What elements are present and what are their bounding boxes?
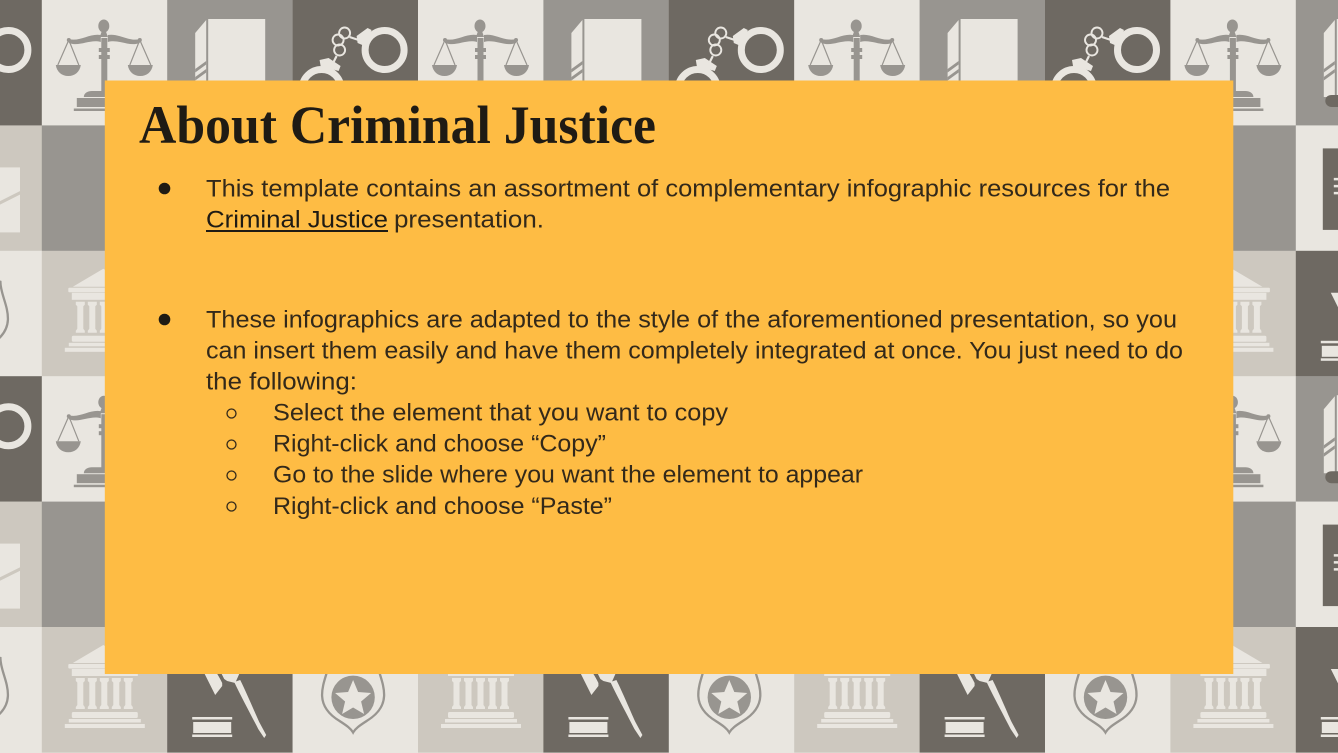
tile: police badge [669,627,794,753]
tile: courthouse [418,627,544,753]
text block: second bullet: These infographics are adapted to the style of the aforementioned presentation, so you [206,306,1177,334]
text block: second bullet: can insert them easily and have them completely integrated at once. You just need to do [206,338,1183,364]
tile: law book [1296,376,1338,502]
tile: courthouse [1170,627,1296,753]
tile: plain grey [1170,502,1296,627]
tile: scales of justice [1170,0,1296,126]
tile: plain grey [1170,125,1296,251]
text block: first bullet: This template contains an assortment of complementary infographic resources for the [206,176,1170,202]
tile: scales of justice [794,0,920,126]
text block: first bullet: Criminal Justice [206,206,388,234]
tile: plain grey [42,125,167,251]
tile: scales of justice [42,0,167,126]
tile: courthouse [794,627,920,753]
tile: handcuffs [0,376,42,502]
tile: law book [1296,0,1338,126]
tile: plain grey [42,502,167,627]
tile: police badge [0,251,42,376]
list: copy and paste steps: Right-click and choose “Copy” [273,430,606,458]
tile: courthouse [42,251,167,376]
tile: dark book [1296,502,1338,627]
tile: police badge [293,627,418,753]
list: copy and paste steps: Go to the slide where you want the element to appear [273,462,863,488]
tile: courthouse [42,627,167,753]
text block: first bullet: presentation. [394,206,544,234]
tile: light book [0,125,42,251]
tile: police badge [0,627,42,753]
tile: dark book [1296,125,1338,251]
tile: gavel [543,627,669,753]
tile: law book [167,0,293,126]
text block: first bullet [159,176,1170,234]
panel: content card [105,80,1233,674]
list: copy and paste steps: Select the element that you want to copy [273,400,729,426]
tile: law book [920,0,1045,126]
tile: gavel [920,627,1045,753]
text block: second bullet: the following: [206,368,357,396]
list: copy and paste steps [227,400,863,520]
tile: scales of justice [42,376,167,502]
tile: handcuffs [293,0,418,126]
tile: gavel [167,627,293,753]
title: About Criminal Justice [139,95,656,155]
list: copy and paste steps: Right-click and choose “Paste” [273,493,612,520]
tile: gavel [1296,627,1338,753]
tile: light book [0,502,42,627]
tile: courthouse [1170,251,1296,376]
tile: scales of justice [1170,376,1296,502]
tile: scales of justice [418,0,544,126]
tile: handcuffs [1045,0,1171,126]
tile: handcuffs [0,0,42,126]
tile: gavel [1296,251,1338,376]
tile: law book [543,0,669,126]
tile: police badge [1045,627,1171,753]
text block: second bullet [159,306,1183,396]
tile: handcuffs [669,0,794,126]
